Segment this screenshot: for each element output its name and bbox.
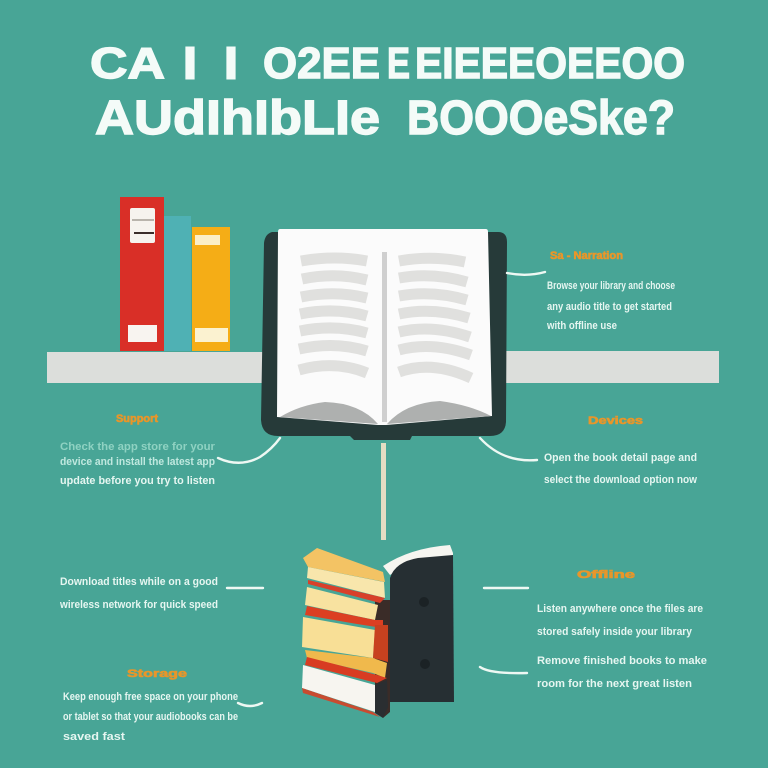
- title: E: [387, 39, 410, 88]
- text block: middle left: [60, 413, 216, 487]
- text block: middle right: Open the book detail page and: [544, 452, 697, 464]
- text block: bottom left: saved fast: [63, 731, 125, 743]
- icon: upright books on shelf: [120, 197, 230, 351]
- text block: middle right: [544, 415, 697, 486]
- text block: lower right: room for the next great listen: [537, 678, 692, 690]
- text block: bottom left: or tablet so that your audiobooks can be: [63, 711, 238, 723]
- title: CA: [90, 39, 165, 88]
- text block: top right: Browse your library and choose: [547, 280, 675, 292]
- text block: lower right: Listen anywhere once the files are: [537, 603, 703, 615]
- icon: stacked closed books: [302, 545, 454, 718]
- text block: middle left: update before you try to listen: [60, 475, 215, 487]
- page text lines: right: [399, 258, 471, 378]
- text block: bottom left: [63, 668, 238, 743]
- connector lines: [218, 272, 545, 706]
- title: I: [225, 39, 237, 88]
- page text lines: left: [299, 258, 367, 373]
- title: AUdIhIbLIe: [95, 92, 380, 145]
- heading: Devices: [588, 415, 643, 427]
- heading: Offline: [577, 569, 635, 581]
- text block: middle left: Check the app store for your: [60, 441, 216, 453]
- title: BOOOeSke?: [407, 92, 675, 145]
- text block: lower right: stored safely inside your library: [537, 626, 693, 638]
- text block: lower left: wireless network for quick speed: [59, 599, 218, 611]
- title: [90, 39, 685, 145]
- text block: lower left: [59, 576, 218, 611]
- icon: open book: [261, 229, 507, 440]
- heading: Storage: [127, 668, 187, 680]
- heading: Support: [116, 413, 158, 425]
- title: I: [184, 39, 196, 88]
- title: O2EE: [263, 39, 380, 88]
- bookshelf: [47, 351, 719, 383]
- text block: lower right: Remove finished books to make: [537, 655, 707, 667]
- text block: bottom left: Keep enough free space on your phone: [63, 691, 238, 703]
- text block: lower right: [537, 569, 707, 690]
- title: EIEEEOEEOO: [415, 39, 685, 88]
- text block: middle left: device and install the latest app: [60, 456, 215, 468]
- text block: top right: with offline use: [546, 320, 617, 332]
- text block: lower left: Download titles while on a good: [60, 576, 218, 588]
- text block: middle right: select the download option now: [544, 474, 697, 486]
- heading: Sa - Narration: [550, 250, 623, 262]
- text block: top right: any audio title to get started: [547, 301, 672, 313]
- text block: top right: [546, 250, 675, 332]
